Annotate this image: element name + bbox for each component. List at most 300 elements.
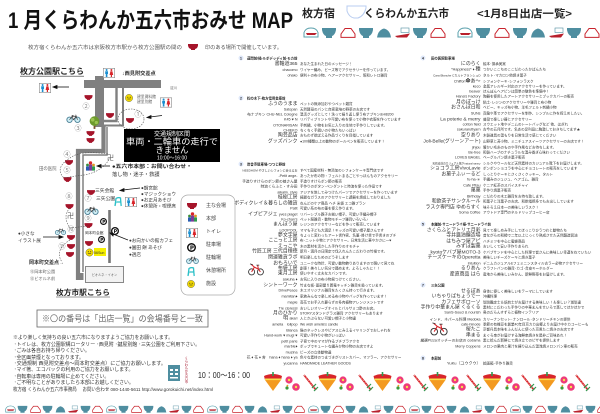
section 4	[420, 56, 584, 214]
header right: event name: くらわんか五六市	[364, 6, 449, 20]
section 3: 使いやすく丈夫なカバンです。	[300, 270, 349, 276]
map labels: 建里資料館	[137, 94, 156, 99]
vendor column: sections 4 to 8	[420, 56, 592, 366]
section 3: レジンのアクセサリーなどを作って販売しています	[300, 222, 381, 226]
notice box	[37, 310, 208, 327]
section 4: *Happiness* ♦ 種	[451, 66, 480, 72]
section 5: Intuition	[468, 262, 480, 266]
notice box: ※〇の番号は「出店一覧」の会場番号と一致	[42, 314, 204, 324]
section 1: 書軸道365	[275, 60, 298, 67]
section 3: marble♦	[284, 344, 298, 348]
section 7: 身体に優しく美味しいをテーマにしています	[483, 288, 553, 294]
section 3: 子育て中のママが作るプチプラアクセ	[300, 338, 360, 344]
section 7: まぐろ串がお届けする海鮮串焼きを是非ご賞味あれ！	[483, 332, 567, 338]
decorative band: bottom	[6, 406, 600, 413]
section 4: ベーグルパン焼き菓子販売	[483, 154, 526, 160]
info list: headquarters	[112, 162, 192, 178]
section 3: まんぼう屋	[273, 220, 298, 228]
legend panel	[181, 195, 235, 295]
title: 1 月くらわんか五六市おみせ MAP	[8, 8, 293, 33]
section 3: ママも子ども大満足！キッズの可愛い帽子屋さんです	[300, 228, 384, 232]
venue numbers: ⑦	[84, 194, 92, 202]
section 3: We wish amelia's candle	[300, 322, 338, 326]
section 3: 手造りすけらのボン節の娘さん屋	[242, 178, 298, 184]
section 4: 木製道具の温もりを日常生活で感じてください	[483, 132, 557, 138]
section 4: keco	[473, 84, 480, 88]
section 3: 竹匠工房 三代目桓徳	[252, 248, 298, 254]
map labels: 三矢公園	[96, 195, 115, 202]
section 3: ボディクレイ＆暮らしの雑貨	[234, 200, 298, 206]
section 5: はちみつ屋アピ	[446, 238, 481, 244]
section 1: あなた生まれた日のメッセージ！	[300, 61, 352, 66]
section 3: Tre cipressi	[279, 306, 298, 310]
section 4: シフォンケーキ･シフォンラスク	[483, 78, 534, 84]
section 5: ケバブサンドを中心とした料理で皆さんに美味しい幸運をねていたい	[483, 250, 592, 254]
section 5: 寺井醤油醸造場	[446, 232, 481, 238]
section 4: 真鍮や革でアクセサリーを制作、シンプルに作を控えめしたい。	[483, 110, 584, 116]
venue numbers: ②	[82, 102, 90, 110]
section 4: jinjou	[471, 146, 480, 150]
section 2: ペットの無添加おやつペット雑貨	[300, 101, 353, 106]
section 2: 松の木下-枚方信用金庫前	[247, 96, 286, 100]
map labels: 三矢会館	[95, 187, 114, 194]
legend labels: 本部	[206, 215, 216, 222]
section 7: カフェサボローソ	[441, 298, 481, 306]
section 3: NEEDHOM やさしいシフォンに会えるお	[242, 168, 298, 172]
section 3: すべて国産材料・無添加のシフォンケーキ専門店です	[300, 168, 384, 172]
section 2: 天然酵母のパンと自家栽培の野菜のお店です	[300, 106, 371, 112]
map labels: ↓西見附交差点	[122, 69, 157, 77]
notes: ･トイレは、枚方公園駅構ロータリー ･西見附 ･鍵屋別館 ･三矢公園をご利用下さい。	[14, 341, 200, 348]
callout: traffic restriction: 車両・二輪車の走行で	[126, 136, 218, 146]
info list: Sanya hall: ●朝宮館	[141, 184, 158, 192]
section 5: おいしくて安い手作りあられ	[483, 244, 529, 248]
decorative band: top	[304, 28, 599, 38]
map labels	[29, 69, 178, 282]
section 4: 手編みのジュジュ、ヘアゴム、雑貨	[483, 176, 539, 182]
section 5: 5	[422, 222, 424, 226]
section 8: 8	[422, 356, 424, 360]
section 7: 沖縄料理	[483, 294, 497, 298]
notes: ･マイ箸、エコバックの利用のご協力をお願いします。	[14, 366, 133, 373]
section 7: cafe-hinode	[461, 322, 480, 326]
section 3: petit parle	[281, 340, 298, 344]
section 2: CHIEKO	[283, 128, 298, 132]
dashed venue zones	[59, 109, 144, 262]
section 5: 本舗前-サニードライ様-サニードライ前	[431, 222, 492, 226]
section 3: おもろいで	[273, 260, 298, 266]
section 2: ちくちく手縫いの小物たちいっぱい	[300, 128, 356, 132]
legend labels: トイレ	[206, 229, 221, 235]
section 8	[420, 356, 513, 366]
section 1: ワイヤー編み、ビーズ等でアクセサリーを作っています。	[300, 67, 390, 72]
notes	[13, 334, 213, 393]
map icons	[55, 94, 133, 243]
info list: okamoto: ●週店	[129, 251, 141, 258]
section 7: カリーナンセット･ナンロール･タンドリーチキンの提供	[483, 316, 571, 322]
section 8: 絵画箱･手作り雑貨	[483, 360, 513, 366]
section 7: SanS-Souci & nourish	[444, 310, 480, 314]
section 7: 三矢公園	[431, 282, 445, 288]
section 3: muzina	[286, 350, 298, 354]
section 3: おいしいオリーブオイルとバルサミコ酢のお店。	[300, 306, 377, 310]
section 3: 3	[240, 162, 242, 166]
section 4: タルト･マカロン他焼き菓子	[483, 72, 527, 78]
section 3: 竹まな板･面部屋り着竜キッチン雑貨を扱っています。	[300, 282, 385, 288]
intro text: 印のある場所で開催しています。	[205, 43, 282, 51]
section 5: kyotoケバブ屋MOTO-3	[430, 248, 481, 256]
section 7: 手作り中華まん屋 くるくる	[421, 304, 481, 310]
section 3: 岸舎寺駐車場-つつじ野前	[247, 162, 286, 166]
section 7: 桜たこ	[466, 326, 481, 332]
section 3: 桂樹工房	[278, 194, 298, 200]
section 4: 味そろえ日本一の美味しいラスク！	[483, 204, 539, 210]
info list: headquarters: ●五六市本部：お問い合わせ・	[112, 162, 192, 170]
section 4: fu-ha-＊	[467, 178, 481, 182]
section 3: 綺麗なガラスのアクセサリーと透器を焼成しておりました	[300, 194, 391, 200]
map	[18, 66, 192, 297]
section 5: さくらふとアトリエ月彩	[427, 226, 481, 234]
venue numbers: ①	[134, 110, 142, 118]
info list: small illustration show: イラスト展	[18, 238, 41, 244]
section 4: Be-tree	[468, 150, 480, 154]
section 4: ほんぽんヘアピンは簡単の魅色を準備中！	[483, 88, 550, 94]
info list: small illustration show	[18, 230, 41, 244]
section 3: ちょっと変わったアート書作家、名筆･掛け書で手書きのプチ	[300, 232, 397, 238]
info list: small illustration show: ●小さな	[18, 230, 35, 237]
section 3: 可愛い手作り小物がいっぱい	[300, 332, 346, 338]
section 7: 京都丹具本味をふんだんに使った京風たこ焼きのお店です	[483, 326, 574, 332]
section 8: 本部前	[431, 356, 442, 360]
section 4: 和飲茶子サンクルール	[432, 198, 481, 204]
section 7: Merry Coppens	[455, 344, 481, 348]
legend labels: 駐車場	[206, 241, 221, 248]
section 3: ねんどのケア商品 ヘチ 米袋 エコ雑プラン	[300, 200, 366, 206]
section 4: ベビー、キッズ布小物、羊毛フェルト刺繍小物	[483, 104, 557, 110]
notes: ･交通規制 西見附交差点～岡本町交差点）にご協力お願いします。	[14, 360, 166, 367]
section 3: 月のひかり	[273, 310, 298, 316]
section 8: YuKu（ユウクウ）	[447, 360, 480, 366]
section 4: 菓菓	[471, 186, 481, 194]
section 3: シントーワーク	[263, 282, 298, 288]
section 5: 産地から美味しいみかん、新鮮野菜をお届けします。	[483, 272, 567, 276]
section 1: ohako	[287, 74, 298, 78]
section 3: イブピアジェ yves piaget	[248, 210, 298, 218]
section 4: LOVES BAGEL	[455, 156, 480, 160]
section 5: みずほ製菓	[456, 242, 481, 250]
section 3: 木の素材を活かした手作りのオモチャ	[300, 244, 360, 248]
section 4: しっとりケーキとさくさくクッキー、タルト	[483, 172, 553, 176]
section 7: せるぽあ	[461, 288, 481, 294]
section 2: ふうのうまま	[268, 101, 298, 107]
section 7	[420, 282, 589, 348]
legend labels	[206, 202, 226, 287]
section 1: 道間前/橋-ルボデッディ前-モカ前	[247, 56, 298, 60]
venue numbers: ⑤	[64, 166, 70, 174]
section 3: ポップでキュートな編みか物小物のお店ですよ	[300, 344, 374, 348]
map labels: 田の医院	[39, 165, 57, 172]
section 3: 創事！美々しい気分で踊めます。よろしゃたに！！	[300, 266, 380, 270]
icon: red bicycle (right)	[431, 323, 447, 335]
section 3: Ko-chan's	[281, 218, 298, 222]
info list: okamoto: ●園田 餅 あそび	[129, 244, 162, 251]
map labels: 淀川	[170, 85, 178, 90]
section 4: Soma Coffee	[459, 210, 480, 214]
header right: event name	[302, 6, 572, 20]
section 4: おさんぽ日和	[451, 104, 481, 110]
section 2: 温活グッズとして！洗って繰り返し使う布ナプキン&Hi8200	[300, 112, 394, 116]
callout: traffic restriction: 交通規制区間	[154, 130, 190, 138]
callout: traffic restriction: きません	[156, 145, 188, 155]
notes: ･自転車は専用の駐輪場に止めてください。	[14, 373, 109, 380]
venue numbers: ⑧	[66, 192, 72, 200]
section 3: 時浪くらふと・すみ田	[261, 184, 298, 188]
section 3: 明 akari	[283, 316, 298, 322]
section 3: 東月工房	[278, 270, 298, 276]
section 3: 花 ♦ 花 ♦ 舎 hana ♦ hana ♦ ya	[247, 354, 298, 360]
section 3: 木エオリジナル雑貨をたくさん持って行きます。	[300, 288, 376, 292]
section 4: スウエット地やデニムのトートバッグなど 他、はぎれ	[483, 122, 568, 126]
section 4: Chiffon✿あ〜	[454, 78, 480, 84]
legend labels: 駐輪場	[206, 254, 221, 261]
map labels: 岡本町交差点→	[29, 259, 64, 266]
section 3: HANDMADE LEATHER GOODS	[300, 362, 352, 366]
section 4: 普段で楽しい器とアクセサリー	[483, 116, 532, 122]
section 4: ケニア紅茶のスパイスチャイ	[483, 182, 528, 188]
section 4: sakuraruttyarn	[457, 128, 480, 132]
section 4: 絵本･操承美実	[483, 61, 506, 66]
section 4: アウトドア専門のネルドリップコーヒー店	[483, 210, 550, 214]
section 3: リバーシブル親子お揃い帽子、可愛い手編み帽子	[300, 212, 377, 216]
section 4: 空りあり	[461, 132, 480, 138]
section 3: 可愛い系の布の筆を使え作ります。	[300, 206, 356, 210]
section 5: るりあん	[461, 266, 481, 272]
venue numbers	[58, 102, 142, 250]
section 3: alkalin. style	[277, 190, 298, 194]
section 3: 手作りのボタン･ペンダントと時浪を使った作品です	[300, 184, 383, 188]
notes: ※より楽しく気持ちの良い五六市になりますようご協力をお願いします。	[13, 334, 173, 341]
section 3	[234, 162, 402, 366]
section 7: 7	[422, 284, 424, 288]
section 4: beaver	[469, 90, 481, 94]
building: Biorne	[86, 266, 124, 282]
legend labels: 施設	[206, 280, 216, 287]
section 7: 厳選Pizzaオッチーのお店の codama	[420, 338, 481, 342]
section 2	[238, 96, 401, 144]
info list: Sanya hall: ●休憩所・喫煙席	[141, 202, 176, 210]
temple marks: 卍	[107, 154, 114, 162]
notes: ･ごみは各自お持ち帰りください。	[14, 347, 90, 354]
section 2: グッズバンク	[268, 138, 298, 144]
section 2: 陶芸品店	[278, 132, 298, 138]
section 3: 明日楽しむためのどうぞします	[300, 254, 349, 260]
section 3: ここっと工房	[268, 238, 298, 244]
section 5: クラフトバンの雑貨･カゴ･合皮キーホルダー	[483, 266, 554, 270]
section 3: -Petit ange-	[278, 174, 298, 178]
info list: Sanya hall	[141, 184, 176, 210]
section 3: 夢文字屋	[278, 232, 298, 238]
building: Biorne: ビオルネ・イオン	[92, 272, 117, 277]
section 7: 珈琲鑑定士＆焙煎士がお届けする美味しい！＆楽しい？珈琲達	[483, 300, 581, 304]
legend labels: 休憩場所	[206, 267, 226, 274]
logo block: くらわんか五六市	[184, 356, 188, 384]
section 5: ハチミツを中心に蜜蜂商品	[483, 238, 525, 244]
section 4: Hana's Factory	[456, 94, 481, 98]
temple marks: 卍	[67, 212, 74, 220]
opening hours: 10：00～16：00	[198, 371, 250, 380]
section 4: 古今の五月所です。名あの足列品に胸激しておきちしてます★	[483, 126, 581, 132]
section 1	[238, 56, 390, 78]
section 3: 家族みんなで楽しめる布小物やバッグを作っています！	[300, 294, 387, 298]
section 3: 猫のネックレスやピアスにみえるイヤリングでおしゃれを	[300, 328, 391, 332]
section 7: インド、ネパール料理 Medoka	[430, 316, 481, 322]
toilet icons	[39, 68, 172, 207]
section 3: ユニークな時計、可愛い動物飾りありますので覗いて見てね	[300, 260, 395, 266]
section 4: 和菓子と洋菓子のお店、和飲指携多でもお出ししています	[483, 198, 574, 204]
section 4: つかいここちのここだわったかばんたち	[483, 66, 546, 72]
section 3: 手造りすけらボン節の販売	[300, 178, 342, 184]
section 4: 和製ハーブのナチュラルな温み香ぎ心味わってください	[483, 150, 571, 154]
section 7: 素に拾んだ新鮮にて焼き立てのピザを提供します	[483, 338, 560, 342]
section 2: OTONARISAN	[273, 124, 298, 128]
section 4: Cara Blanche CカルトブランシュD	[433, 72, 481, 78]
venue numbers: ⑩	[68, 226, 74, 234]
section 2: リバティプリントや可愛い布を使って小物や衣服を作っています	[300, 116, 401, 122]
section 4: cotton field	[463, 122, 480, 126]
venue numbers: ⑨	[84, 214, 92, 222]
section 4: 暖かい毛糸のものや手作風などお待ちします。	[483, 144, 556, 150]
section 1: 便利＋の布小物、ヘアーアクセサリー、昭和レトロ雑貨	[300, 72, 388, 78]
venue numbers: ③	[74, 124, 82, 132]
section 3: Patit	[290, 206, 298, 210]
section 5: 見てて楽しめみ手にしてほっこりひうつわと動物たち	[483, 228, 567, 232]
section 4: ボンボンショコラを中心にチョコレートの販売をしています	[483, 166, 578, 170]
section 5	[420, 222, 592, 278]
map labels: ⑫岡本町公園	[30, 268, 55, 275]
section 4: ラスク専門店 ゆめらすく	[426, 204, 480, 210]
map labels: 岡本町会館	[85, 230, 104, 235]
section 3: yucanna	[284, 362, 298, 366]
notes: ･全区画禁煙となっております。	[14, 354, 84, 361]
section 3: お気に入りの布小物見つけてください。	[300, 276, 363, 282]
info list: okamoto	[129, 237, 173, 258]
section 3: 布袋工房	[278, 264, 298, 272]
section 3: DrivePeace	[278, 288, 298, 292]
notes: ･ご不明なことがありましたら本部にお越しください。	[14, 379, 134, 386]
section 3: 人とかぶらない可愛い帽子と小物達	[300, 316, 356, 320]
info list: Sanya hall: ●お正月あそび	[141, 196, 172, 204]
heading: Hirakatashi station: 枚方市駅こちら	[56, 287, 110, 297]
section 3: maple	[287, 300, 298, 304]
section 7: 串まる	[466, 332, 481, 338]
map labels: ⑬ビオルネ前	[30, 275, 55, 282]
section 4: Joli-Belle(グリーンアート)	[423, 138, 481, 144]
section 4: 山野草と苔小物、ミニチュアスイーツアクセサリーのお店です！	[483, 138, 584, 144]
icon: red bicycle (middle)	[249, 264, 263, 275]
section 4: La poterie & merry	[440, 116, 481, 122]
temple marks	[67, 154, 114, 220]
section 5: 昔ながらの和樽で二年以上じっくり熟成させた天然醸造醤油	[483, 232, 578, 238]
section 4: 手作り焼菓子販売	[483, 188, 511, 192]
section 4: 天然素材のカジュアル靴下natural sanny	[432, 162, 481, 166]
section 5: 産直商品 はら	[450, 270, 481, 278]
intro text: 枚方宿くらわんか五六市は京阪枚方市駅から枚方公園駅の間の	[28, 43, 182, 51]
section 2: K45 ♥ N	[284, 118, 298, 122]
section 5: チーズケーキのOperetta	[427, 254, 481, 260]
map labels: 建里別館	[137, 99, 152, 104]
section 3: アジアを旅してみつけたパーツでアクセサリーを作っています	[300, 190, 398, 194]
section 4: にのらく	[461, 61, 480, 67]
section 4: 陶器を使用したアートアクセサリーとブックカバーの販売	[483, 94, 574, 98]
section 4: Birthday	[467, 194, 481, 198]
section 2: 2	[240, 96, 242, 100]
section 5: 美味しいチーズケーキと焼き菓子	[483, 254, 536, 260]
section 7: 季節の有機豆を創業40年目京カカ出郷よりお届け中ホカコーヒーも	[483, 322, 589, 326]
section 3: えっこや	[278, 242, 298, 250]
section 3: sakuha ♦	[283, 278, 298, 282]
venue bowls	[64, 95, 134, 257]
section 3: STORYスタンドグラス雑貨 アクセサリーもあります	[300, 310, 383, 316]
section 3: 新月・満月の日限定で伐入れんたこだわりの竹根です。	[300, 248, 387, 254]
header right: event name: <1月8日出店一覧>	[477, 7, 572, 20]
info list: Sanya hall: ●マジックショウ	[141, 190, 176, 198]
section 3: 高花でお手入れ要らずの多肉植物アレンジメントです	[300, 300, 384, 304]
section 4: 金属アレルギー対応のアクセサリーを作っています。	[483, 84, 566, 88]
section 4: Cafe Pitau	[463, 184, 480, 188]
intro text	[28, 43, 282, 51]
section 3: あったか布の物・フェルトまるごとやっほんものアクセサリー	[300, 173, 398, 178]
section 3: Bianca	[286, 328, 298, 332]
section 4: SUNs	[471, 112, 481, 116]
section 3: Hand-work ♥ mugi ♥	[264, 334, 298, 338]
info list: okamoto: ●お向かいの館カフェ	[129, 237, 173, 244]
section 2: Satopan	[284, 108, 298, 112]
section 5: デニムカジュアル&フェミニンスタイル古ラー必物アクセサリー	[483, 260, 583, 266]
legend icons	[186, 203, 198, 288]
section 7: 奥のだらんすずらと植物インテリア	[483, 310, 539, 314]
section 3: amelia lolipop	[272, 322, 298, 326]
section 7: いちゃりばちょうでー	[432, 292, 481, 300]
notes: 枚方宿 くらわんか五六市事務局 お問い合わせ 080-1440-5611 http://www.gorokuichi.net/index.html	[13, 386, 213, 393]
decorative band: tops and flowers	[264, 372, 590, 391]
roads	[76, 76, 161, 280]
venue numbers: ⑪	[58, 242, 66, 250]
section 4: こだわりの木工雑貨をお持ち致します。	[483, 194, 546, 198]
56Sun marker	[86, 248, 106, 256]
section 3: LOOPOOL	[279, 228, 298, 232]
section 2: 手刺繍、小物をお気に入りの生地で手作りしています。	[300, 122, 387, 128]
arrows	[43, 86, 162, 240]
section 4: 月のぽっけ	[456, 98, 481, 106]
section 2: 布ナプキン CHU-NEL Cologne	[247, 112, 298, 116]
section 2: ●100種類以上の動物のボールペンを販売しています！	[300, 138, 385, 144]
section 3: ビーズの立体動物達	[300, 350, 332, 354]
section 3: 布･ニット小物とアクセサリー。日常生活に華やかさに一♥	[300, 238, 391, 242]
section 2: おもわず欲ばえる作品づくりを目指しています	[300, 132, 374, 138]
section 4: 田の医院駐車場	[431, 56, 455, 60]
section 4: 4	[422, 56, 424, 60]
section 4: シルクやウールなど天然素材のカジュアル靴下をお届けします。	[483, 160, 584, 166]
callout: traffic restriction: 10:00～16:00	[157, 156, 187, 162]
section 4: ショコラ工房VivoLavie	[430, 166, 481, 172]
logo block	[168, 356, 188, 384]
info list: headquarters: 落し物・迷子・救護	[112, 170, 160, 178]
section 7: 素材にこだわった手作りの中華まんをせいろで蒸してほかほかで	[483, 304, 585, 310]
section 3: 関運雑貨ラボ	[268, 254, 298, 260]
header right: event name: 枚方宿	[302, 6, 335, 20]
vendor column: sections 1 to 3	[234, 56, 402, 366]
section 3: 色々な素材のつまづきがリストカバー、マフラー、アクセサリー	[300, 354, 402, 360]
